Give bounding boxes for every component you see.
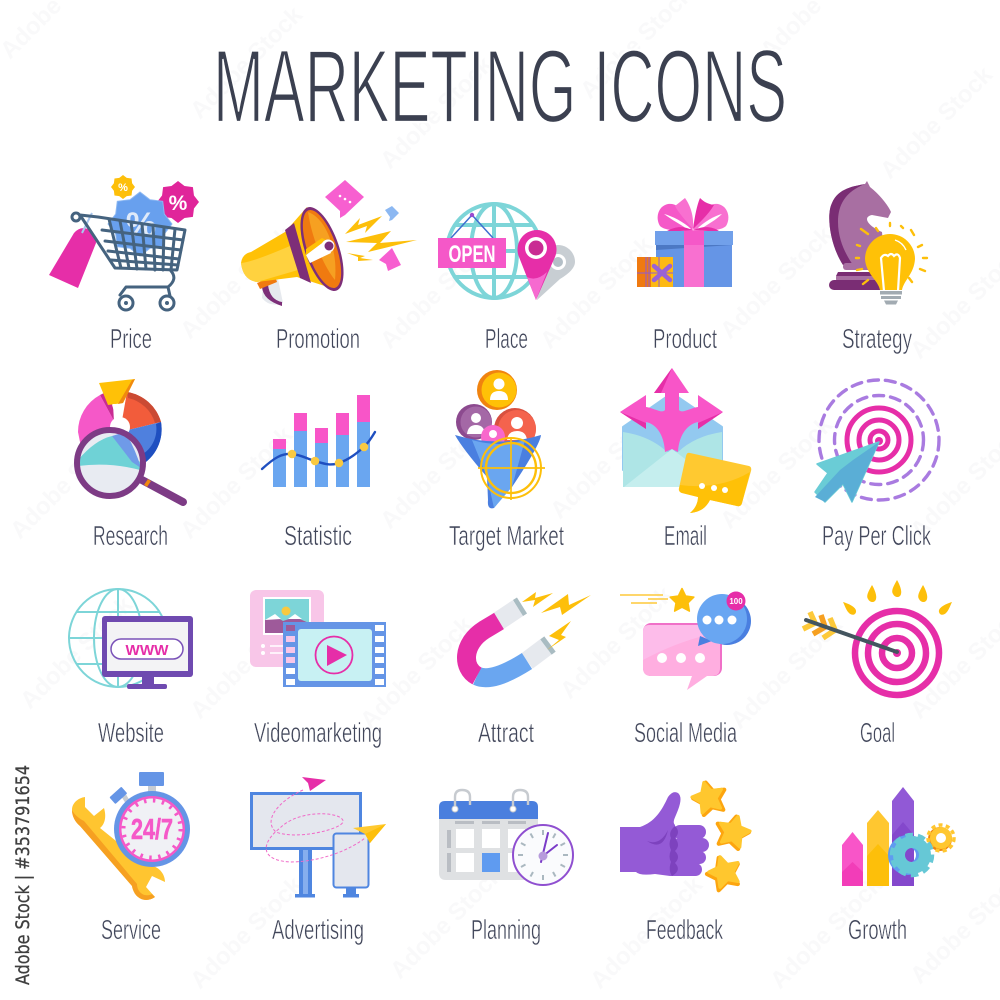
text: Adobe Stock [175,421,298,544]
icon: attract horseshoe magnet [467,592,591,678]
label: Target Market [449,520,564,551]
text: Adobe Stock [175,221,298,344]
label: Attract [478,717,534,748]
icon: videomarketing card and film strip [250,590,386,687]
label: Planning [471,914,541,945]
text: Adobe Stock [725,611,848,734]
text: Adobe Stock [185,871,308,994]
label: Strategy [842,323,912,354]
label: Advertising [272,914,364,945]
label: Product [653,323,717,354]
icon: advertising billboard [252,777,386,898]
icon: price shopping cart: % [118,182,128,194]
label: Price [110,323,152,354]
icon: place globe with pin: OPEN [448,241,496,268]
icon: website globe and monitor [69,589,193,689]
vertical stock credit: Adobe Stock | #353791654 [12,765,34,985]
icon: feedback thumbs up and stars [620,778,753,892]
label: Website [98,717,164,748]
label: Email [664,520,707,551]
text: Adobe Stock [875,61,998,184]
text: Adobe Stock [585,871,708,994]
label: Growth [848,914,907,945]
text: Adobe Stock [765,871,888,994]
label: Promotion [276,323,360,354]
text: Adobe Stock [15,591,138,714]
icon: price shopping cart: % [126,206,156,244]
text: Adobe Stock [355,611,478,734]
icon: service wrench and stopwatch: 24/7 [131,814,173,846]
label: Social Media [634,717,737,748]
text: Adobe Stock [545,401,668,524]
text: Adobe Stock [535,231,658,354]
icon: place globe with pin [438,204,575,300]
icon: service wrench and stopwatch [72,772,190,900]
text: Adobe Stock [375,411,498,534]
label: Goal [860,717,895,748]
icon: email envelope with arrows [620,368,751,513]
icon: promotion megaphone [241,180,417,306]
text: Adobe Stock [715,411,838,534]
icon: product gift boxes [637,198,733,287]
label: Feedback [646,914,724,945]
label: Statistic [284,520,352,551]
icon: social media chat bubbles [620,588,751,690]
icon: statistic bar chart [262,395,375,487]
icon: price shopping cart: % [169,192,188,215]
text: Adobe Stock [185,601,308,724]
text: Adobe Stock [375,231,498,354]
icon: research pie chart with magnifier [77,379,183,502]
icon: website globe and monitor: WWW [126,642,169,659]
icon: growth arrows and gears [842,787,954,886]
icon: strategy chess knight with light bulb [829,181,927,304]
text: Adobe Stock [185,1,308,124]
icon: target market funnel [455,370,545,508]
label: Research [93,520,168,551]
text: Adobe Stock [375,51,498,174]
text: Adobe Stock [555,581,678,704]
icon: planning calendar and clock [439,790,573,885]
icon: goal target with arrow [803,580,952,695]
text: Adobe Stock [385,861,508,984]
text: Adobe Stock [5,421,128,544]
label: Pay Per Click [822,520,932,551]
icon: pay per click target and cursor [815,380,939,502]
label: Videomarketing [254,717,382,748]
icon: price shopping cart [49,175,199,310]
icon: social media chat bubbles: 100 [729,597,743,606]
text: Adobe Stock [715,221,838,344]
label: Service [101,914,161,945]
label: Place [485,323,528,354]
